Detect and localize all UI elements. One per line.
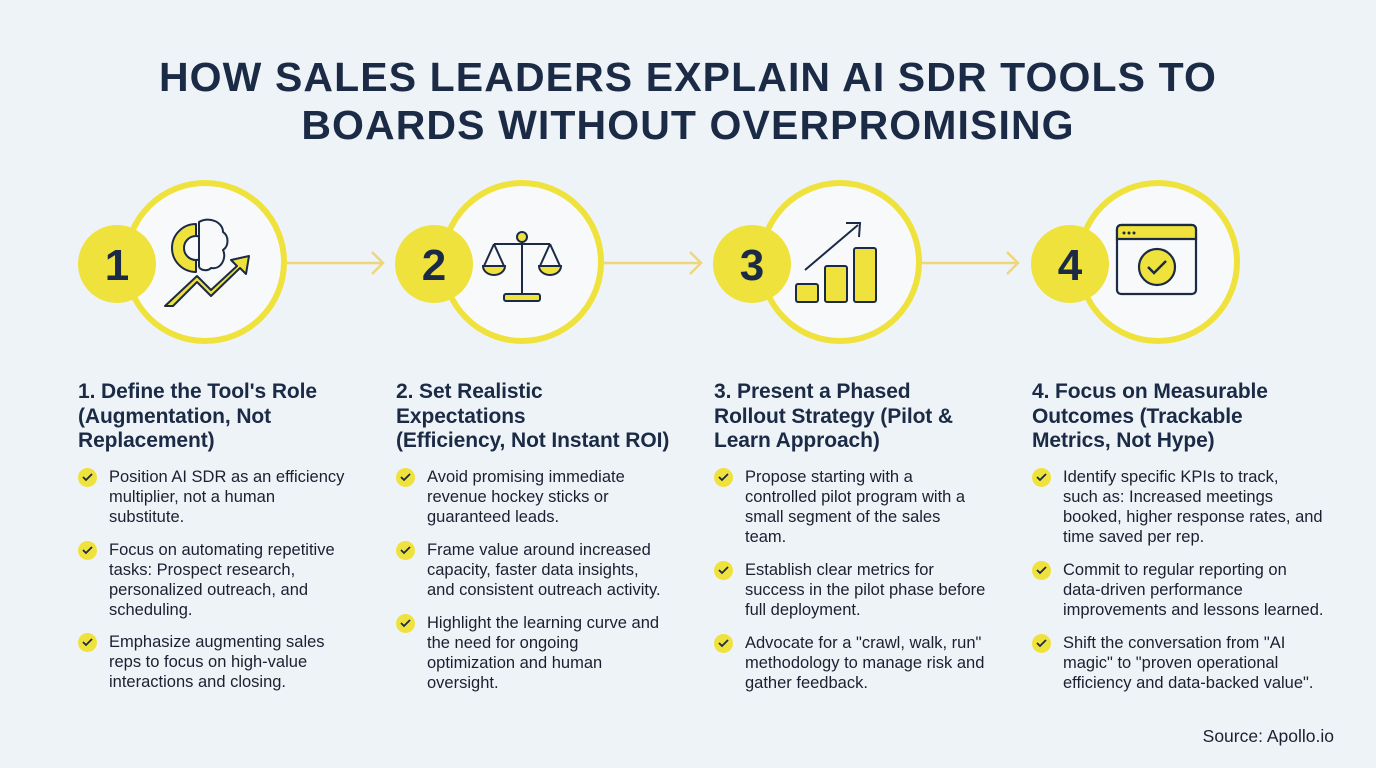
bullet: Establish clear metrics for — [745, 561, 934, 579]
bullet: revenue hockey sticks or — [427, 488, 609, 506]
heading 3: Learn Approach) — [714, 429, 880, 452]
bullets col 1 — [78, 468, 344, 691]
bullets col 4 — [1032, 468, 1323, 692]
title — [159, 54, 1217, 148]
bullet — [1032, 561, 1323, 619]
bullets col 3 — [714, 468, 985, 692]
heading 2: 2. Set Realistic — [396, 380, 543, 403]
heading 2 — [396, 380, 669, 452]
bullet: data-driven performance — [1063, 581, 1243, 599]
bullet: efficiency and data-backed value". — [1063, 674, 1313, 692]
bullet: interactions and closing. — [109, 673, 286, 691]
bullet: reps to focus on high-value — [109, 653, 307, 671]
bullet: Shift the conversation from "AI — [1063, 634, 1285, 652]
bullet: Frame value around increased — [427, 541, 651, 559]
heading 4: 4. Focus on Measurable — [1032, 380, 1268, 403]
bullet: time saved per rep. — [1063, 528, 1204, 546]
heading 4: Outcomes (Trackable — [1032, 404, 1243, 428]
bullet: the need for ongoing — [427, 634, 578, 652]
bullet: magic" to "proven operational — [1063, 654, 1278, 672]
arrow 3 — [922, 252, 1018, 274]
bullet: improvements and lessons learned. — [1063, 601, 1323, 619]
bullet: substitute. — [109, 508, 184, 526]
heading 1 — [78, 380, 317, 452]
bullet — [78, 633, 325, 691]
bullet: capacity, faster data insights, — [427, 561, 639, 579]
bullet — [78, 468, 344, 526]
heading 2: Expectations — [396, 404, 526, 428]
bullet: methodology to manage risk and — [745, 654, 984, 672]
bullet: guaranteed leads. — [427, 508, 559, 526]
bullet — [1032, 468, 1323, 546]
step 4 circles — [1031, 183, 1237, 341]
heading 3: 3. Present a Phased — [714, 380, 911, 403]
arrow 2 — [604, 252, 701, 274]
bullet: scheduling. — [109, 601, 192, 619]
bullet: Advocate for a "crawl, walk, run" — [745, 634, 981, 652]
icon: gear brain growth — [165, 220, 249, 306]
bullet: success in the pilot phase before — [745, 581, 985, 599]
bullet: multiplier, not a human — [109, 488, 275, 506]
bullet: gather feedback. — [745, 674, 868, 692]
bullet: oversight. — [427, 674, 499, 692]
bullet — [714, 634, 984, 692]
bullet: Propose starting with a — [745, 468, 913, 486]
bullet — [78, 541, 335, 619]
step 3 circles — [713, 183, 919, 341]
bullet: Avoid promising immediate — [427, 468, 625, 486]
bullets col 2 — [396, 468, 661, 692]
bullet: and consistent outreach activity. — [427, 581, 661, 599]
heading 3: Rollout Strategy (Pilot & — [714, 404, 953, 428]
heading 4 — [1032, 380, 1268, 452]
icon: bar chart growth — [796, 223, 876, 302]
heading 1: 1. Define the Tool's Role — [78, 380, 317, 403]
bullet — [396, 614, 659, 692]
bullet — [396, 468, 625, 526]
bullet: optimization and human — [427, 654, 602, 672]
bullet: small segment of the sales — [745, 508, 940, 526]
step 2 circles — [395, 183, 601, 341]
title: HOW SALES LEADERS EXPLAIN AI SDR TOOLS TO — [159, 54, 1217, 100]
step 4 circles: 4 — [1058, 241, 1083, 290]
heading 2: (Efficiency, Not Instant ROI) — [396, 429, 669, 452]
diagram: steps circles and arrows — [78, 180, 1240, 344]
icon: browser check — [1117, 225, 1196, 294]
heading 1: Replacement) — [78, 429, 215, 452]
bullet: full deployment. — [745, 601, 861, 619]
bullet: team. — [745, 528, 786, 546]
bullet: such as: Increased meetings — [1063, 488, 1273, 506]
step 2 circles: 2 — [422, 241, 446, 290]
bullet: Commit to regular reporting on — [1063, 561, 1287, 579]
bullet: booked, higher response rates, and — [1063, 508, 1323, 526]
bullet: tasks: Prospect research, — [109, 561, 295, 579]
source note: Source: Apollo.io — [1203, 726, 1334, 746]
bullet — [396, 541, 661, 599]
bullet: Identify specific KPIs to track, — [1063, 468, 1278, 486]
arrow 1 — [287, 252, 383, 274]
bullet — [1032, 634, 1313, 692]
bullet: controlled pilot program with a — [745, 488, 965, 506]
heading 1: (Augmentation, Not — [78, 404, 271, 428]
bullet — [714, 468, 966, 546]
bullet: Position AI SDR as an efficiency — [109, 468, 344, 486]
bullet: Emphasize augmenting sales — [109, 633, 325, 651]
title: BOARDS WITHOUT OVERPROMISING — [301, 102, 1075, 148]
bullet: personalized outreach, and — [109, 581, 308, 599]
bullet — [714, 561, 985, 619]
step 1 circles: 1 — [105, 241, 129, 290]
step 3 circles: 3 — [740, 241, 764, 290]
bullet: Focus on automating repetitive — [109, 541, 335, 559]
heading 3 — [714, 380, 953, 452]
bullet: Highlight the learning curve and — [427, 614, 659, 632]
icon: scales — [483, 232, 561, 301]
heading 4: Metrics, Not Hype) — [1032, 429, 1215, 452]
step 1 circles — [78, 183, 284, 341]
